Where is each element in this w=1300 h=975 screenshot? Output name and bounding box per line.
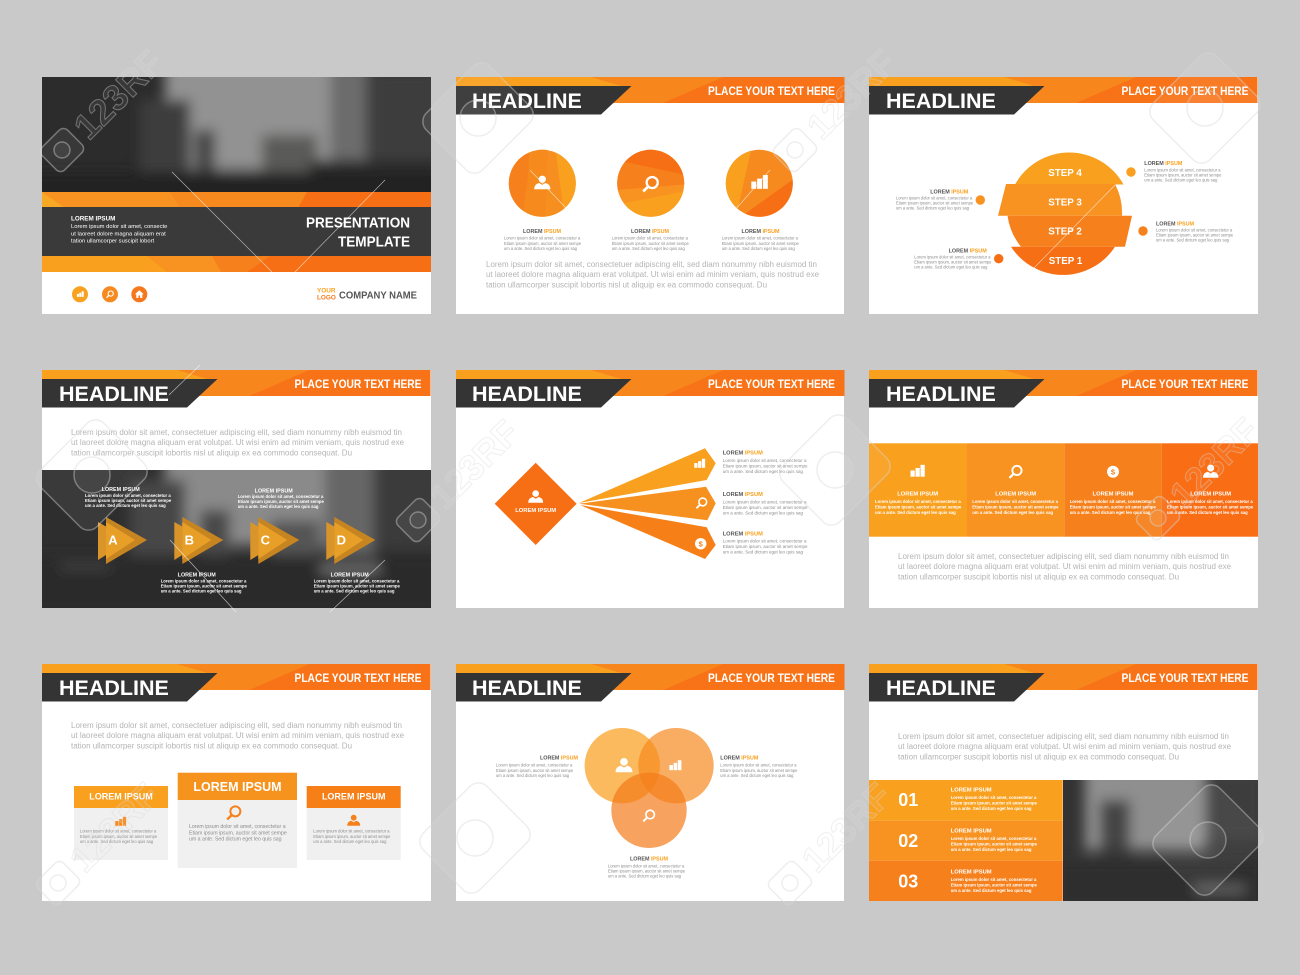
watermark: 123RF bottom right centre: 123RF	[794, 775, 899, 880]
slide 2 paragraph: Lorem ipsum dolor sit amet, consectetuer adipiscing elit, sed diam nonummy nibh euismod tin	[486, 260, 817, 269]
step 4 text: um a ante. Sed dictum eget leo quis sag	[1144, 177, 1218, 182]
row 01: 01	[898, 790, 918, 810]
slide 6 paragraph: tation ullamcorper suscipit lobortis nisl ut aliquip ex ea commodo consequat. Du	[898, 572, 1179, 581]
arrow 1 text: Etiam ipsum ipsum, auctor sit amet sempe	[723, 464, 808, 468]
watermark: 123RF middle centre: 123RF	[422, 412, 527, 517]
label D: Lorem ipsum dolor sit amet, consectetur a	[314, 579, 399, 584]
circle 3 caption: Etiam ipsum ipsum, auctor sit amet sempe	[722, 241, 800, 246]
slide 6 paragraph: ut laoreet dolore magna aliquam erat volutpat. Ut wisi enim ad minim veniam, quis nostrud exe	[898, 562, 1232, 571]
column 3: Etiam ipsum ipsum, auctor sit amet sempe	[1070, 504, 1157, 510]
row 02: LOREM IPSUM	[951, 828, 992, 834]
circle 2 caption: Etiam ipsum ipsum, auctor sit amet sempe	[612, 241, 690, 246]
step 3 text	[896, 189, 974, 210]
label C: Lorem ipsum dolor sit amet, consectetur a	[238, 494, 323, 499]
circle 3 caption: um a ante. Sed dictum eget leo quis sag	[722, 246, 795, 251]
company name: COMPANY NAME	[339, 290, 417, 302]
triangle D: D	[337, 532, 346, 547]
slide 4: photo with triangles	[42, 370, 431, 608]
row 02: Etiam ipsum ipsum, auctor sit amet sempe	[951, 842, 1038, 846]
label B: LOREM IPSUM	[178, 572, 216, 578]
step dots	[976, 167, 1148, 263]
cover left text: Lorem ipsum dolor sit amet, consecte	[71, 224, 167, 230]
label D	[314, 572, 401, 594]
step 2 text: um a ante. Sed dictum eget leo quis sag	[1156, 237, 1230, 242]
watermark: 123RF middle centre	[391, 412, 527, 548]
step 1 text	[914, 248, 992, 270]
step 2 text: Lorem ipsum dolor sit amet, consectetur a	[1156, 227, 1232, 232]
card left: Etiam ipsum ipsum, auctor sit amet sempe	[80, 834, 158, 839]
card left	[74, 786, 168, 860]
slide 4 header: HEADLINE	[59, 382, 169, 406]
slide 9 paragraph: tation ullamcorper suscipit lobortis nisl ut aliquip ex ea commodo consequat. Du	[898, 752, 1179, 761]
slide 3 header	[869, 77, 1258, 114]
step 2 text	[1156, 221, 1234, 242]
slide 4 paragraph: Lorem ipsum dolor sit amet, consectetuer adipiscing elit, sed diam nonummy nibh euismod tin	[71, 428, 402, 437]
diamond	[495, 463, 577, 545]
arrow 2 text: Lorem ipsum dolor sit amet, consectetur a	[723, 499, 806, 504]
cover left text: LOREM IPSUM	[71, 216, 115, 223]
label A: LOREM IPSUM	[102, 487, 140, 493]
venn right text	[720, 756, 798, 778]
arrow 2 text	[723, 492, 808, 515]
step 4 text: LOREM IPSUM	[1144, 161, 1183, 167]
arrow 2	[579, 487, 716, 520]
column 2: Etiam ipsum ipsum, auctor sit amet sempe	[972, 504, 1059, 510]
label B: um a ante. Sed dictum eget leo quis sag	[161, 589, 242, 594]
slide 4 paragraph: tation ullamcorper suscipit lobortis nisl ut aliquip ex ea commodo consequat. Du	[71, 448, 352, 457]
row 01: um a ante. Sed dictum eget leo quis sag	[951, 806, 1032, 811]
circle 3 caption: LOREM IPSUM	[741, 229, 780, 235]
circle 3 caption	[722, 229, 800, 251]
watermark: camera top centre	[418, 58, 538, 178]
watermark: camera top right	[1145, 48, 1265, 168]
slide 7 paragraph: Lorem ipsum dolor sit amet, consectetuer adipiscing elit, sed diam nonummy nibh euismod tin	[71, 721, 402, 730]
slide 6 header: HEADLINE	[886, 382, 996, 406]
slide 9 paragraph: Lorem ipsum dolor sit amet, consectetuer adipiscing elit, sed diam nonummy nibh euismod tin	[898, 732, 1229, 741]
circle 2 caption: Lorem ipsum dolor sit amet, consectetur a	[612, 236, 688, 241]
venn bottom text: um a ante. Sed dictum eget leo quis sag	[608, 874, 682, 879]
card right: um a ante. Sed dictum eget leo quis sag	[313, 839, 387, 844]
circle 2 caption: um a ante. Sed dictum eget leo quis sag	[612, 246, 685, 251]
venn icon: person	[616, 758, 632, 772]
step 4 segment	[1015, 153, 1124, 184]
column 4: LOREM IPSUM	[1190, 492, 1231, 498]
step 2 segment	[1008, 216, 1132, 247]
triangle C: C	[261, 532, 271, 547]
column 3: LOREM IPSUM	[1093, 492, 1134, 498]
card center: Lorem ipsum dolor sit amet, consectetur a	[189, 824, 286, 830]
venn icon: search	[643, 810, 654, 821]
venn left text: um a ante. Sed dictum eget leo quis sag	[496, 773, 570, 778]
arrow 3	[580, 505, 716, 559]
row 03: Etiam ipsum ipsum, auctor sit amet sempe	[951, 882, 1038, 888]
label C: LOREM IPSUM	[255, 488, 293, 494]
slide 2 header	[456, 77, 844, 114]
label C	[238, 488, 325, 509]
venn right text: Lorem ipsum dolor sit amet, consectetur a	[720, 763, 797, 768]
step 1 text: Lorem ipsum dolor sit amet, consectetur a	[914, 255, 991, 260]
column 3: $	[1111, 468, 1116, 476]
arrow 2 text: Etiam ipsum ipsum, auctor sit amet sempe	[723, 505, 808, 510]
cover left text: tation ullamcorper suscipit lobort	[71, 239, 155, 245]
slide 5 header	[456, 370, 844, 408]
slide 3: steps circle	[869, 77, 1258, 314]
slide 2 paragraph: ut laoreet dolore magna aliquam erat volutpat. Ut wisi enim ad minim veniam, quis nostrud exe	[486, 270, 820, 279]
card right: Etiam ipsum ipsum, auctor sit amet sempe	[313, 834, 391, 839]
slide 2 header: PLACE YOUR TEXT HERE	[708, 86, 835, 98]
label A: Etiam ipsum ipsum, auctor sit amet sempe	[85, 498, 172, 503]
column 2: Lorem ipsum dolor sit amet, consectetur a	[972, 499, 1058, 504]
column 3: Lorem ipsum dolor sit amet, consectetur a	[1070, 499, 1155, 504]
venn right text: um a ante. Sed dictum eget leo quis sag	[720, 773, 794, 778]
venn left text: Etiam ipsum ipsum, auctor sit amet sempe	[496, 768, 574, 773]
step labels: STEP 3	[1048, 197, 1082, 208]
row 02	[869, 821, 1063, 861]
cover title: PRESENTATION	[306, 216, 410, 232]
slide 9 header: HEADLINE	[886, 676, 996, 700]
slide 8 header: PLACE YOUR TEXT HERE	[708, 673, 835, 685]
slide 7 header: HEADLINE	[59, 676, 169, 700]
card left: Lorem ipsum dolor sit amet, consectetur a	[80, 829, 156, 834]
row 03: 03	[898, 872, 918, 892]
step labels: STEP 4	[1048, 168, 1082, 179]
venn right text: Etiam ipsum ipsum, auctor sit amet sempe	[720, 768, 798, 773]
watermark: camera bottom centre	[415, 778, 535, 898]
watermark: 123RF top right centre: 123RF	[799, 42, 904, 147]
watermark: 123RF middle right: 123RF	[1162, 410, 1267, 515]
column 1: um a ante. Sed dictum eget leo quis sag	[875, 510, 956, 515]
arrow 3 text: Etiam ipsum ipsum, auctor sit amet sempe	[723, 544, 808, 549]
label B: Etiam ipsum ipsum, auctor sit amet sempe	[161, 584, 248, 589]
label A	[85, 487, 172, 508]
circle 1 caption: LOREM IPSUM	[523, 229, 562, 235]
triangle A: A	[108, 532, 118, 547]
watermark: 123RF middle right	[1131, 410, 1267, 546]
slide 9 header	[869, 664, 1258, 702]
column 1: Lorem ipsum dolor sit amet, consectetur a	[875, 499, 961, 504]
circle 1 with person icon	[508, 150, 576, 217]
venn bottom text	[608, 857, 686, 879]
slide 7: three cards	[42, 664, 431, 901]
label C: um a ante. Sed dictum eget leo quis sag	[238, 504, 319, 509]
arrow 3: $	[699, 540, 704, 548]
cover blurred city photo	[42, 77, 431, 192]
row 01: Etiam ipsum ipsum, auctor sit amet sempe	[951, 800, 1038, 806]
circle 2 caption	[612, 229, 690, 251]
slide 2 header: HEADLINE	[472, 89, 582, 113]
slide 7 header	[42, 664, 430, 702]
column 2	[967, 443, 1064, 537]
cover upper orange band	[42, 192, 431, 208]
triangle C	[250, 517, 299, 564]
column 4	[1162, 443, 1258, 537]
column 2: um a ante. Sed dictum eget leo quis sag	[972, 510, 1053, 515]
cover title: TEMPLATE	[338, 235, 410, 251]
card center: Etiam ipsum ipsum, auctor sit amet sempe	[189, 830, 287, 836]
venn bottom text: Etiam ipsum ipsum, auctor sit amet sempe	[608, 868, 686, 874]
slide 6: four column band	[869, 370, 1258, 608]
venn circles	[585, 728, 714, 848]
slide 9 paragraph: ut laoreet dolore magna aliquam erat volutpat. Ut wisi enim ad minim veniam, quis nostrud exe	[898, 742, 1232, 751]
circle 3 with bars icon	[726, 150, 793, 217]
cover icon: search	[102, 286, 118, 302]
card right: LOREM IPSUM	[322, 792, 385, 802]
column 2: LOREM IPSUM	[995, 492, 1036, 498]
slide 6 header: PLACE YOUR TEXT HERE	[1122, 379, 1249, 391]
slide 9: numbered list with photo	[869, 664, 1265, 910]
watermark: 123RF top right centre	[768, 42, 904, 178]
triangle A	[98, 517, 147, 564]
diamond: LOREM IPSUM	[515, 508, 556, 514]
row 02: um a ante. Sed dictum eget leo quis sag	[951, 847, 1032, 852]
arrow 1 text: LOREM IPSUM	[723, 451, 763, 457]
row 01: Lorem ipsum dolor sit amet, consectetur a	[951, 795, 1036, 800]
watermark: 123RF bottom left: 123RF	[62, 775, 167, 880]
arrow 3 text	[723, 531, 808, 555]
arrow 2 text: LOREM IPSUM	[723, 492, 763, 498]
watermark: 123RF top left: 123RF	[66, 42, 171, 147]
card right: Lorem ipsum dolor sit amet, consectetur a	[313, 829, 390, 834]
slide 4 header: PLACE YOUR TEXT HERE	[294, 379, 422, 391]
card center: LOREM IPSUM	[193, 780, 282, 794]
watermark: camera middle left	[32, 415, 152, 535]
slide 3 header: HEADLINE	[886, 89, 996, 113]
arrow 1 text	[723, 451, 808, 474]
watermark: camera bottom right	[1148, 780, 1268, 900]
cover title	[306, 216, 410, 251]
your logo: LOGO	[317, 294, 336, 302]
your logo	[317, 288, 336, 302]
step 3 text: LOREM IPSUM	[930, 189, 969, 195]
cover dark band	[42, 207, 431, 256]
circle 3 caption: Lorem ipsum dolor sit amet, consectetur a	[722, 236, 798, 241]
venn left text: LOREM IPSUM	[540, 756, 579, 762]
column 3: um a ante. Sed dictum eget leo quis sag	[1070, 510, 1151, 515]
watermark: 123RF top left	[35, 42, 171, 178]
step labels	[1048, 168, 1083, 267]
slide 9 header: PLACE YOUR TEXT HERE	[1122, 673, 1249, 685]
card left: LOREM IPSUM	[89, 792, 153, 802]
arrow 3 text: Lorem ipsum dolor sit amet, consectetur a	[723, 539, 806, 544]
venn right text: LOREM IPSUM	[720, 756, 759, 762]
slide 6 header	[869, 370, 1258, 408]
arrow 1 text: um a ante. Sed dictum eget leo quis sag	[723, 469, 803, 474]
label A: Lorem ipsum dolor sit amet, consectetur a	[85, 493, 171, 498]
label B: Lorem ipsum dolor sit amet, consectetur a	[161, 579, 246, 584]
slide 7 paragraph: tation ullamcorper suscipit lobortis nisl ut aliquip ex ea commodo consequat. Du	[71, 741, 352, 750]
circle 2 caption: LOREM IPSUM	[631, 229, 670, 235]
step 4 text: Lorem ipsum dolor sit amet, consectetur a	[1144, 167, 1221, 172]
slide 5 header: HEADLINE	[472, 382, 582, 406]
slide 5: diamond and arrows	[456, 370, 844, 608]
arrow 1 text: Lorem ipsum dolor sit amet, consectetur a	[723, 458, 806, 463]
step 4 text: Etiam ipsum ipsum, auctor sit amet sempe	[1144, 172, 1222, 177]
step 1 text: LOREM IPSUM	[949, 248, 987, 254]
arrow 3 text: LOREM IPSUM	[723, 531, 763, 537]
cover lower orange band	[42, 256, 431, 272]
step 3 text: Lorem ipsum dolor sit amet, consectetur a	[896, 195, 972, 200]
card right	[307, 786, 401, 860]
label D: Etiam ipsum ipsum, auctor sit amet sempe	[314, 584, 401, 589]
slide 2: three circles	[456, 77, 844, 314]
column 1: Etiam ipsum ipsum, auctor sit amet sempe	[875, 504, 962, 510]
label B	[161, 572, 248, 594]
triangle D	[326, 517, 375, 564]
venn left text: Lorem ipsum dolor sit amet, consectetur a	[496, 763, 572, 768]
arrow 3 text: um a ante. Sed dictum eget leo quis sag	[723, 550, 803, 555]
step 2 text: Etiam ipsum ipsum, auctor sit amet sempe	[1156, 232, 1234, 237]
row 02: 02	[898, 831, 918, 851]
column 1: LOREM IPSUM	[897, 492, 938, 498]
watermark: 123RF bottom left	[31, 775, 167, 911]
cover icon: bars	[72, 286, 88, 302]
slide 2 paragraph: tation ullamcorper suscipit lobortis nisl ut aliquip ex ea commodo consequat. Du	[486, 280, 767, 289]
slide 1: cover	[42, 77, 431, 314]
triangle B: B	[185, 532, 194, 547]
step labels: STEP 1	[1049, 256, 1083, 267]
step 3 segment	[998, 184, 1122, 216]
slide 4 blurred city photo	[42, 470, 431, 608]
circle 1 caption	[504, 229, 582, 251]
column 4: Etiam ipsum ipsum, auctor sit amet sempe	[1167, 504, 1254, 510]
step labels: STEP 2	[1048, 227, 1082, 238]
row 01	[869, 780, 1063, 821]
venn icon: bars	[669, 760, 681, 770]
circle 1 caption: um a ante. Sed dictum eget leo quis sag	[504, 246, 578, 251]
slide 6 paragraph: Lorem ipsum dolor sit amet, consectetuer adipiscing elit, sed diam nonummy nibh euismod tin	[898, 552, 1229, 561]
row 02: Lorem ipsum dolor sit amet, consectetur a	[951, 836, 1036, 841]
watermark: camera middle right centre	[775, 410, 895, 530]
cover left text	[71, 216, 167, 245]
slide 8 header: HEADLINE	[472, 676, 582, 700]
arrow 2 text: um a ante. Sed dictum eget leo quis sag	[723, 510, 803, 515]
arrow 1	[579, 448, 716, 503]
watermark: 123RF bottom right centre	[763, 775, 899, 911]
cover icon: home	[131, 286, 147, 302]
row 03: Lorem ipsum dolor sit amet, consectetur a	[951, 877, 1036, 882]
slide 8: venn diagram	[456, 664, 844, 901]
slide 7 header: PLACE YOUR TEXT HERE	[294, 673, 422, 685]
venn left text	[496, 756, 579, 778]
slide 4 paragraph: ut laoreet dolore magna aliquam erat volutpat. Ut wisi enim ad minim veniam, quis nostrud exe	[71, 438, 405, 447]
slide 5 header: PLACE YOUR TEXT HERE	[708, 379, 835, 391]
card center	[178, 773, 297, 868]
step 3 text: um a ante. Sed dictum eget leo quis sag	[896, 205, 970, 210]
venn bottom text: Lorem ipsum dolor sit amet, consectetur a	[608, 863, 684, 868]
row 03: LOREM IPSUM	[951, 869, 992, 875]
column 4: um a ante. Sed dictum eget leo quis sag	[1167, 510, 1248, 515]
step 2 text: LOREM IPSUM	[1156, 221, 1195, 227]
card center: um a ante. Sed dictum eget leo quis sag	[189, 837, 282, 843]
step 4 text	[1144, 161, 1222, 182]
row 03: um a ante. Sed dictum eget leo quis sag	[951, 888, 1032, 893]
label A: um a ante. Sed dictum eget leo quis sag	[85, 503, 166, 508]
step 1 text: Etiam ipsum ipsum, auctor sit amet sempe	[914, 260, 992, 265]
step 1 text: um a ante. Sed dictum eget leo quis sag	[914, 265, 988, 270]
step 3 text: Etiam ipsum ipsum, auctor sit amet sempe	[896, 200, 974, 205]
triangle B	[174, 517, 223, 564]
step 1 segment	[1007, 247, 1115, 275]
column 4: Lorem ipsum dolor sit amet, consectetur a	[1167, 499, 1253, 504]
column 1	[869, 443, 967, 537]
label C: Etiam ipsum ipsum, auctor sit amet sempe	[238, 499, 325, 504]
circle 1 caption: Etiam ipsum ipsum, auctor sit amet sempe	[504, 241, 582, 246]
slide 8 header	[456, 664, 844, 702]
row 01: LOREM IPSUM	[951, 787, 992, 793]
slide 9 blurred city photo	[1063, 780, 1258, 901]
cover left text: ut laoreet dolore magna aliquam erat	[71, 231, 166, 237]
slide 3 header: PLACE YOUR TEXT HERE	[1122, 86, 1249, 98]
card left: um a ante. Sed dictum eget leo quis sag	[80, 839, 154, 844]
slide 7 paragraph: ut laoreet dolore magna aliquam erat volutpat. Ut wisi enim ad minim veniam, quis nostrud exe	[71, 731, 405, 740]
circle 1 caption: Lorem ipsum dolor sit amet, consectetur a	[504, 236, 580, 241]
label D: um a ante. Sed dictum eget leo quis sag	[314, 589, 395, 594]
venn bottom text: LOREM IPSUM	[630, 857, 669, 863]
slide 4 header	[42, 370, 430, 408]
circle 2 with search icon	[617, 150, 684, 217]
label D: LOREM IPSUM	[331, 572, 369, 578]
column 3	[1064, 443, 1162, 537]
row 03	[869, 861, 1063, 901]
your logo: YOUR	[317, 288, 336, 294]
